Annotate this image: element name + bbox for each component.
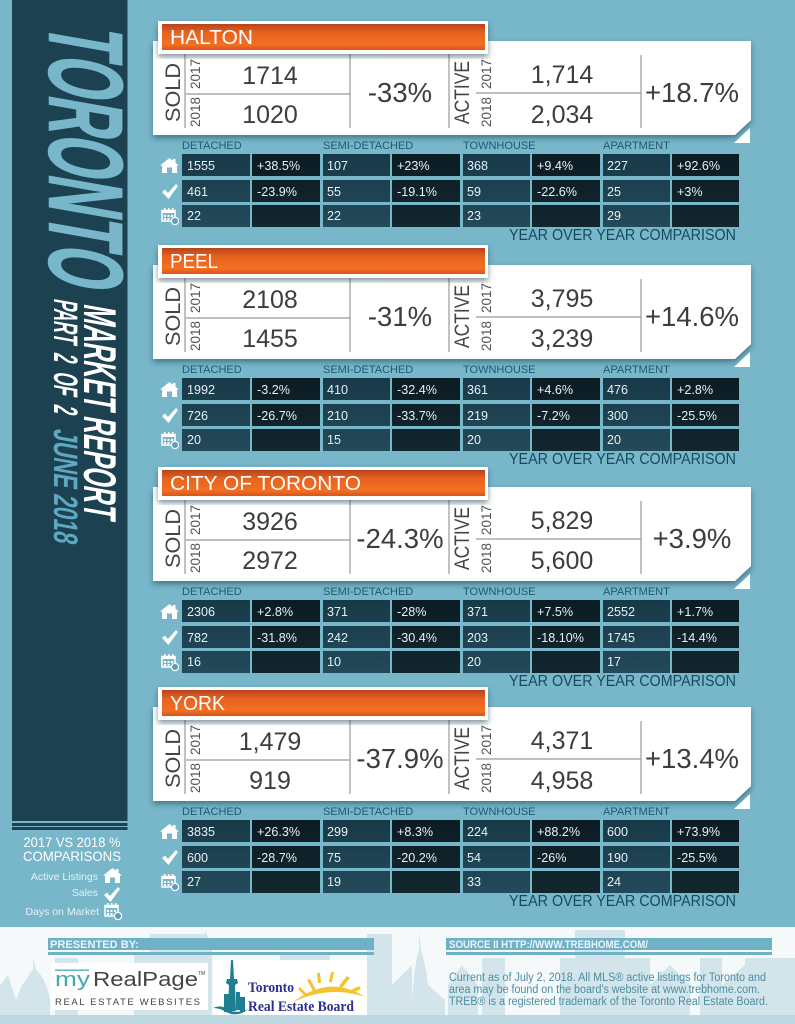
table: Peel breakdown: SEMI-DETACHED	[323, 364, 413, 376]
table: York breakdown: TOWNHOUSE	[463, 806, 536, 818]
summary card: York: 1,479	[239, 728, 301, 756]
table: City of Toronto breakdown: TOWNHOUSE	[463, 586, 536, 598]
sidebar panel	[12, 0, 144, 830]
table: Peel breakdown	[160, 364, 739, 468]
summary card: Halton: 1714	[242, 62, 298, 90]
panel: York	[153, 687, 751, 910]
table: Halton breakdown: 25	[607, 185, 621, 199]
table: Halton breakdown: 461	[187, 185, 208, 199]
table: Halton breakdown: SEMI-DETACHED	[323, 140, 413, 152]
table: City of Toronto breakdown: 1745	[607, 631, 635, 645]
table: York breakdown: -26%	[537, 851, 566, 865]
logo: myRealPage	[51, 963, 208, 1010]
summary card: Halton: 2,034	[531, 101, 593, 129]
table: York breakdown: +73.9%	[677, 825, 720, 839]
heading: City of Toronto: CITY OF TORONTO	[170, 473, 361, 495]
table: York breakdown: +26.3%	[257, 825, 300, 839]
table: Peel breakdown: 210	[327, 409, 348, 423]
table: City of Toronto breakdown: 242	[327, 631, 348, 645]
summary card: City of Toronto: 2017	[479, 505, 494, 535]
logo: Toronto Real Estate Board: Toronto	[248, 980, 294, 996]
table: York breakdown: 33	[467, 875, 481, 889]
summary card: York: +13.4%	[645, 743, 739, 774]
logo: myRealPage: REAL ESTATE WEBSITES	[55, 997, 200, 1008]
table: Peel breakdown: +2.8%	[677, 383, 713, 397]
table: Halton breakdown: +92.6%	[677, 159, 720, 173]
summary card: York	[153, 707, 751, 809]
disclaimer text: TREB® is a registered trademark of the Toronto Real Estate Board.	[449, 996, 768, 1008]
logo: myRealPage: TM	[198, 971, 205, 977]
summary card: City of Toronto: -24.3%	[356, 523, 444, 554]
icon: sun	[293, 972, 365, 1002]
table: York breakdown: +88.2%	[537, 825, 580, 839]
table: City of Toronto breakdown: -30.4%	[397, 631, 437, 645]
footer skyline	[0, 930, 795, 1024]
table: Peel breakdown: APARTMENT	[603, 364, 670, 376]
table: Peel breakdown: -7.2%	[537, 409, 570, 423]
banner: source: SOURCE II HTTP://WWW.TREBHOME.COM/	[449, 939, 648, 951]
table: York breakdown: -28.7%	[257, 851, 297, 865]
table: Halton breakdown: +3%	[677, 185, 703, 199]
table: Halton breakdown: 227	[607, 159, 628, 173]
logo: Toronto Real Estate Board	[213, 960, 367, 1015]
table: Peel breakdown: 15	[327, 433, 341, 447]
summary card: Halton: 2017	[479, 59, 494, 89]
table: City of Toronto breakdown: 371	[467, 605, 488, 619]
table: Halton breakdown: APARTMENT	[603, 140, 670, 152]
table: City of Toronto breakdown: +2.8%	[257, 605, 293, 619]
summary card: Peel: 2017	[188, 283, 203, 313]
summary card: York: 2018	[479, 763, 494, 793]
table: City of Toronto breakdown	[160, 586, 739, 690]
icon: CN tower skyline	[213, 960, 248, 1014]
sidebar subtitle: part 2 of 2: PART 2 OF 2	[46, 297, 84, 418]
logo: myRealPage: RealPage	[93, 969, 198, 991]
summary card: York: ACTIVE	[451, 727, 474, 790]
table: City of Toronto breakdown: DETACHED	[182, 586, 242, 598]
summary card: Peel: 1455	[242, 325, 298, 353]
table: City of Toronto breakdown: 20	[467, 655, 481, 669]
table: York breakdown: 54	[467, 851, 481, 865]
table: York breakdown: 24	[607, 875, 621, 889]
panel: City of Toronto	[153, 467, 751, 690]
summary card: York: 4,958	[531, 767, 593, 795]
table: Halton breakdown: DETACHED	[182, 140, 242, 152]
table: City of Toronto breakdown: +7.5%	[537, 605, 573, 619]
table: Halton breakdown: +9.4%	[537, 159, 573, 173]
table: York breakdown: 3835	[187, 825, 215, 839]
table: Halton breakdown: 1555	[187, 159, 215, 173]
summary card: Peel: 3,795	[531, 285, 593, 313]
table: Halton breakdown: 59	[467, 185, 481, 199]
table: Peel breakdown: 361	[467, 383, 488, 397]
sidebar title: Toronto: TORONTO	[27, 17, 144, 300]
sidebar title: Market Report: MARKET REPORT	[74, 301, 126, 524]
summary card: Halton: +18.7%	[645, 77, 739, 108]
summary card: Peel: ACTIVE	[451, 285, 474, 348]
table: York breakdown: 600	[607, 825, 628, 839]
table: City of Toronto breakdown: YEAR OVER YEAR COMPARISON	[509, 673, 736, 690]
legend: 2017 vs 2018 comparisons: Active Listings	[31, 871, 98, 883]
summary card: Halton: 1,714	[531, 61, 593, 89]
summary card: Halton: 2018	[188, 97, 203, 127]
table: City of Toronto breakdown: -18.10%	[537, 631, 584, 645]
heading: Peel	[158, 245, 488, 278]
table: York breakdown: 600	[187, 851, 208, 865]
summary card: City of Toronto: 2018	[479, 543, 494, 573]
panel: Peel	[153, 245, 751, 468]
table: Halton breakdown: YEAR OVER YEAR COMPARISON	[509, 227, 736, 244]
table: Halton breakdown: 368	[467, 159, 488, 173]
table: York breakdown: DETACHED	[182, 806, 242, 818]
table: City of Toronto breakdown: 2552	[607, 605, 635, 619]
table: Halton breakdown: 55	[327, 185, 341, 199]
table: Peel breakdown: +4.6%	[537, 383, 573, 397]
summary card: York: -37.9%	[356, 743, 444, 774]
table: Halton breakdown: 22	[187, 209, 201, 223]
table: York breakdown: APARTMENT	[603, 806, 670, 818]
summary card: York: 919	[249, 767, 291, 795]
legend: 2017 vs 2018 comparisons: Days on Market	[25, 906, 99, 918]
table: Peel breakdown: -32.4%	[397, 383, 437, 397]
legend: 2017 vs 2018 comparisons: 2017 VS 2018 %	[24, 834, 120, 850]
summary card: City of Toronto: 5,829	[531, 507, 593, 535]
table: City of Toronto breakdown: 2306	[187, 605, 215, 619]
summary card: Peel: -31%	[368, 301, 432, 332]
table: City of Toronto breakdown: 17	[607, 655, 621, 669]
summary card: Halton: 2018	[479, 97, 494, 127]
summary card: City of Toronto	[153, 487, 751, 589]
table: City of Toronto breakdown: -28%	[397, 605, 426, 619]
table: Peel breakdown: 476	[607, 383, 628, 397]
table: Peel breakdown: 300	[607, 409, 628, 423]
table: City of Toronto breakdown: -14.4%	[677, 631, 717, 645]
table: Peel breakdown: 410	[327, 383, 348, 397]
table: York breakdown: 299	[327, 825, 348, 839]
logo: myRealPage: my	[55, 969, 90, 991]
summary card: Peel: SOLD	[162, 287, 185, 346]
table: York breakdown: +8.3%	[397, 825, 433, 839]
summary card: Peel	[153, 265, 751, 367]
legend: 2017 vs 2018 comparisons: COMPARISONS	[23, 848, 121, 864]
table: Halton breakdown: 23	[467, 209, 481, 223]
summary card: City of Toronto: 2972	[242, 547, 298, 575]
summary card: Peel: +14.6%	[645, 301, 739, 332]
table: Halton breakdown: 107	[327, 159, 348, 173]
table: Halton breakdown: +23%	[397, 159, 430, 173]
table: City of Toronto breakdown: 371	[327, 605, 348, 619]
table: City of Toronto breakdown: +1.7%	[677, 605, 713, 619]
heading: York: YORK	[170, 693, 226, 715]
table: City of Toronto breakdown: 782	[187, 631, 208, 645]
banner: presented by	[48, 938, 374, 955]
summary card: York: 4,371	[531, 727, 593, 755]
table: Halton breakdown: -19.1%	[397, 185, 437, 199]
summary card: City of Toronto: +3.9%	[653, 523, 731, 554]
summary card: Halton: 2017	[188, 59, 203, 89]
heading: Halton: HALTON	[170, 27, 253, 49]
table: Peel breakdown: -26.7%	[257, 409, 297, 423]
table: Peel breakdown: 726	[187, 409, 208, 423]
table: York breakdown: 27	[187, 875, 201, 889]
disclaimer text	[449, 972, 768, 1008]
summary card: City of Toronto: 2018	[188, 543, 203, 573]
table: York breakdown: 75	[327, 851, 341, 865]
table: Peel breakdown: 219	[467, 409, 488, 423]
summary card: Peel: 3,239	[531, 325, 593, 353]
summary card: City of Toronto: ACTIVE	[451, 507, 474, 570]
table: Peel breakdown: -33.7%	[397, 409, 437, 423]
summary card: Peel: 2108	[242, 286, 298, 314]
table: Peel breakdown: 20	[467, 433, 481, 447]
table: York breakdown: SEMI-DETACHED	[323, 806, 413, 818]
table: Peel breakdown: -25.5%	[677, 409, 717, 423]
summary card: Halton: -33%	[368, 77, 432, 108]
table: Halton breakdown: -23.9%	[257, 185, 297, 199]
table: Peel breakdown: 20	[607, 433, 621, 447]
table: City of Toronto breakdown: 203	[467, 631, 488, 645]
table: York breakdown	[160, 806, 739, 910]
summary card: City of Toronto: SOLD	[162, 509, 185, 568]
summary card: York: SOLD	[162, 729, 185, 788]
banner: presented by: PRESENTED BY:	[50, 939, 139, 951]
table: Peel breakdown: YEAR OVER YEAR COMPARISON	[509, 451, 736, 468]
table: Halton breakdown: TOWNHOUSE	[463, 140, 536, 152]
table: Halton breakdown: -22.6%	[537, 185, 577, 199]
legend: 2017 vs 2018 comparisons	[23, 834, 122, 920]
table: Halton breakdown: +38.5%	[257, 159, 300, 173]
table: York breakdown: -20.2%	[397, 851, 437, 865]
summary card: Halton	[153, 41, 751, 143]
summary card: Halton: SOLD	[162, 63, 185, 122]
table: Peel breakdown: 20	[187, 433, 201, 447]
table: Halton breakdown: 22	[327, 209, 341, 223]
table: City of Toronto breakdown: 10	[327, 655, 341, 669]
table: York breakdown: 224	[467, 825, 488, 839]
summary card: York: 2017	[479, 725, 494, 755]
summary card: Peel: 2018	[479, 321, 494, 351]
table: York breakdown: -25.5%	[677, 851, 717, 865]
sidebar subtitle: June 2018: JUNE 2018	[46, 427, 84, 547]
heading: York	[158, 687, 488, 720]
table: York breakdown: YEAR OVER YEAR COMPARISON	[509, 893, 736, 910]
table: York breakdown: 19	[327, 875, 341, 889]
heading: Peel: PEEL	[170, 251, 218, 273]
summary card: York: 2017	[188, 725, 203, 755]
table: City of Toronto breakdown: APARTMENT	[603, 586, 670, 598]
table: Peel breakdown: -3.2%	[257, 383, 290, 397]
summary card: City of Toronto: 3926	[242, 508, 298, 536]
table: Peel breakdown: DETACHED	[182, 364, 242, 376]
table: York breakdown: 190	[607, 851, 628, 865]
disclaimer text: area may be found on the board's website at www.trebhome.com.	[449, 984, 760, 996]
summary card: Halton: ACTIVE	[451, 61, 474, 124]
table: Halton breakdown: 29	[607, 209, 621, 223]
legend: 2017 vs 2018 comparisons: Sales	[72, 887, 98, 899]
table: City of Toronto breakdown: -31.8%	[257, 631, 297, 645]
summary card: City of Toronto: 2017	[188, 505, 203, 535]
summary card: Peel: 2017	[479, 283, 494, 313]
table: Halton breakdown	[160, 140, 739, 244]
summary card: Peel: 2018	[188, 321, 203, 351]
footer panel	[0, 927, 795, 1024]
panel: Halton	[153, 21, 751, 244]
banner: source	[446, 938, 772, 955]
summary card: City of Toronto: 5,600	[531, 547, 593, 575]
heading: Halton	[158, 21, 488, 54]
table: City of Toronto breakdown: 16	[187, 655, 201, 669]
summary card: York: 2018	[188, 763, 203, 793]
logo: Toronto Real Estate Board: Real Estate Board	[248, 999, 354, 1015]
heading: City of Toronto	[158, 467, 488, 500]
table: Peel breakdown: TOWNHOUSE	[463, 364, 536, 376]
disclaimer text: Current as of July 2, 2018. All MLS® active listings for Toronto and	[449, 972, 766, 984]
summary card: Halton: 1020	[242, 101, 298, 129]
table: City of Toronto breakdown: SEMI-DETACHED	[323, 586, 413, 598]
table: Peel breakdown: 1992	[187, 383, 215, 397]
